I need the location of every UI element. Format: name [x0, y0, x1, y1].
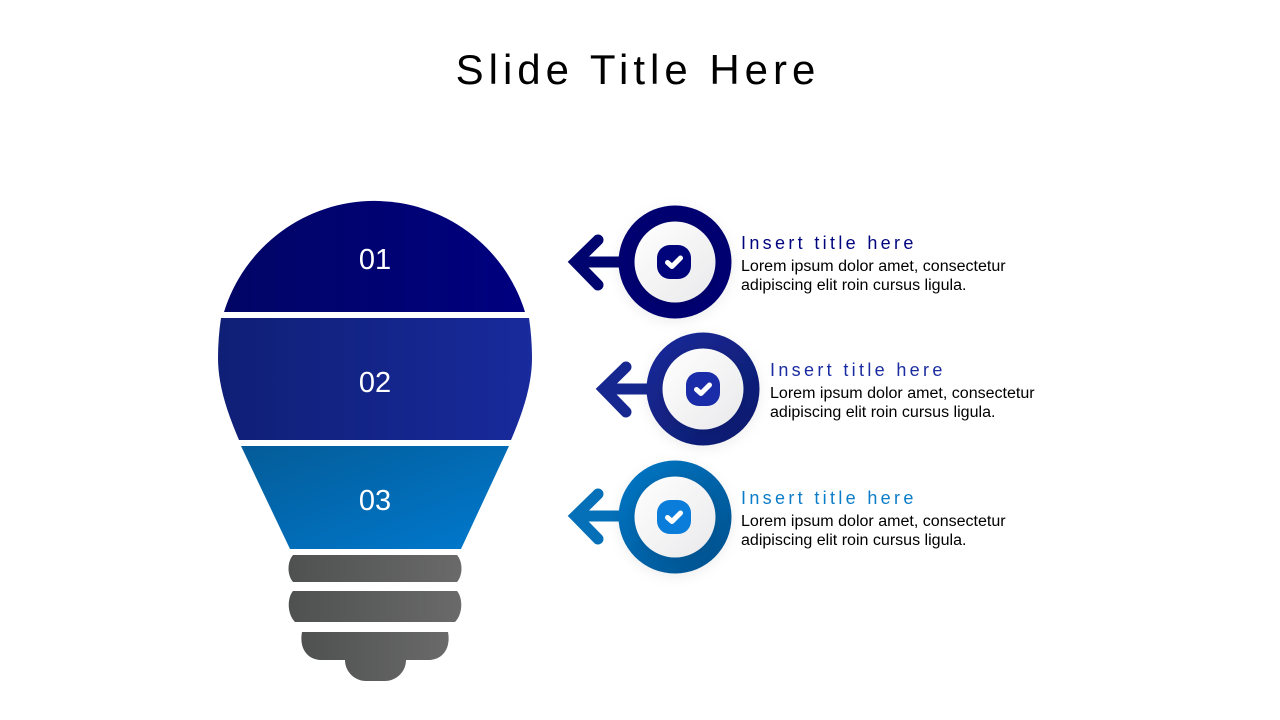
heading 1: Insert title here [741, 233, 917, 253]
bulb segment 01: 01 [359, 244, 391, 276]
bulb base [288, 555, 462, 681]
check icon 3 [657, 500, 691, 534]
text block 3 [741, 488, 1006, 549]
bulb segment 01 [224, 201, 525, 312]
body 3 [741, 512, 1006, 549]
ring 2 [646, 332, 760, 446]
bulb segment 02: 02 [359, 367, 391, 399]
body 2 [770, 384, 1035, 421]
body 2: Lorem ipsum dolor amet, consectetur [770, 384, 1035, 402]
check icon 1 [657, 245, 691, 279]
bulb segment 03: 03 [359, 485, 391, 517]
body 3: Lorem ipsum dolor amet, consectetur [741, 512, 1006, 530]
arrow 1 [576, 240, 630, 285]
arrow 3 [576, 494, 632, 539]
body 2: adipiscing elit roin cursus ligula. [770, 403, 995, 421]
callout graphic 2 [604, 332, 760, 446]
callout graphic 3 [576, 460, 732, 574]
ring 1 [618, 206, 732, 318]
heading 2: Insert title here [770, 360, 946, 380]
light bulb infographic [218, 201, 532, 681]
title: Slide Title Here [456, 46, 820, 93]
ring 3 [618, 460, 732, 574]
bulb segment 03 [241, 446, 509, 549]
body 1 [741, 257, 1006, 294]
text block 1 [741, 233, 1006, 294]
heading 3: Insert title here [741, 488, 917, 508]
bulb segment 02 [218, 318, 532, 440]
check icon 2 [686, 372, 720, 406]
text block 2 [770, 360, 1035, 421]
arrow 2 [604, 367, 658, 412]
callout graphic 1 [576, 206, 732, 318]
body 3: adipiscing elit roin cursus ligula. [741, 531, 966, 549]
body 1: Lorem ipsum dolor amet, consectetur [741, 257, 1006, 275]
body 1: adipiscing elit roin cursus ligula. [741, 276, 966, 294]
